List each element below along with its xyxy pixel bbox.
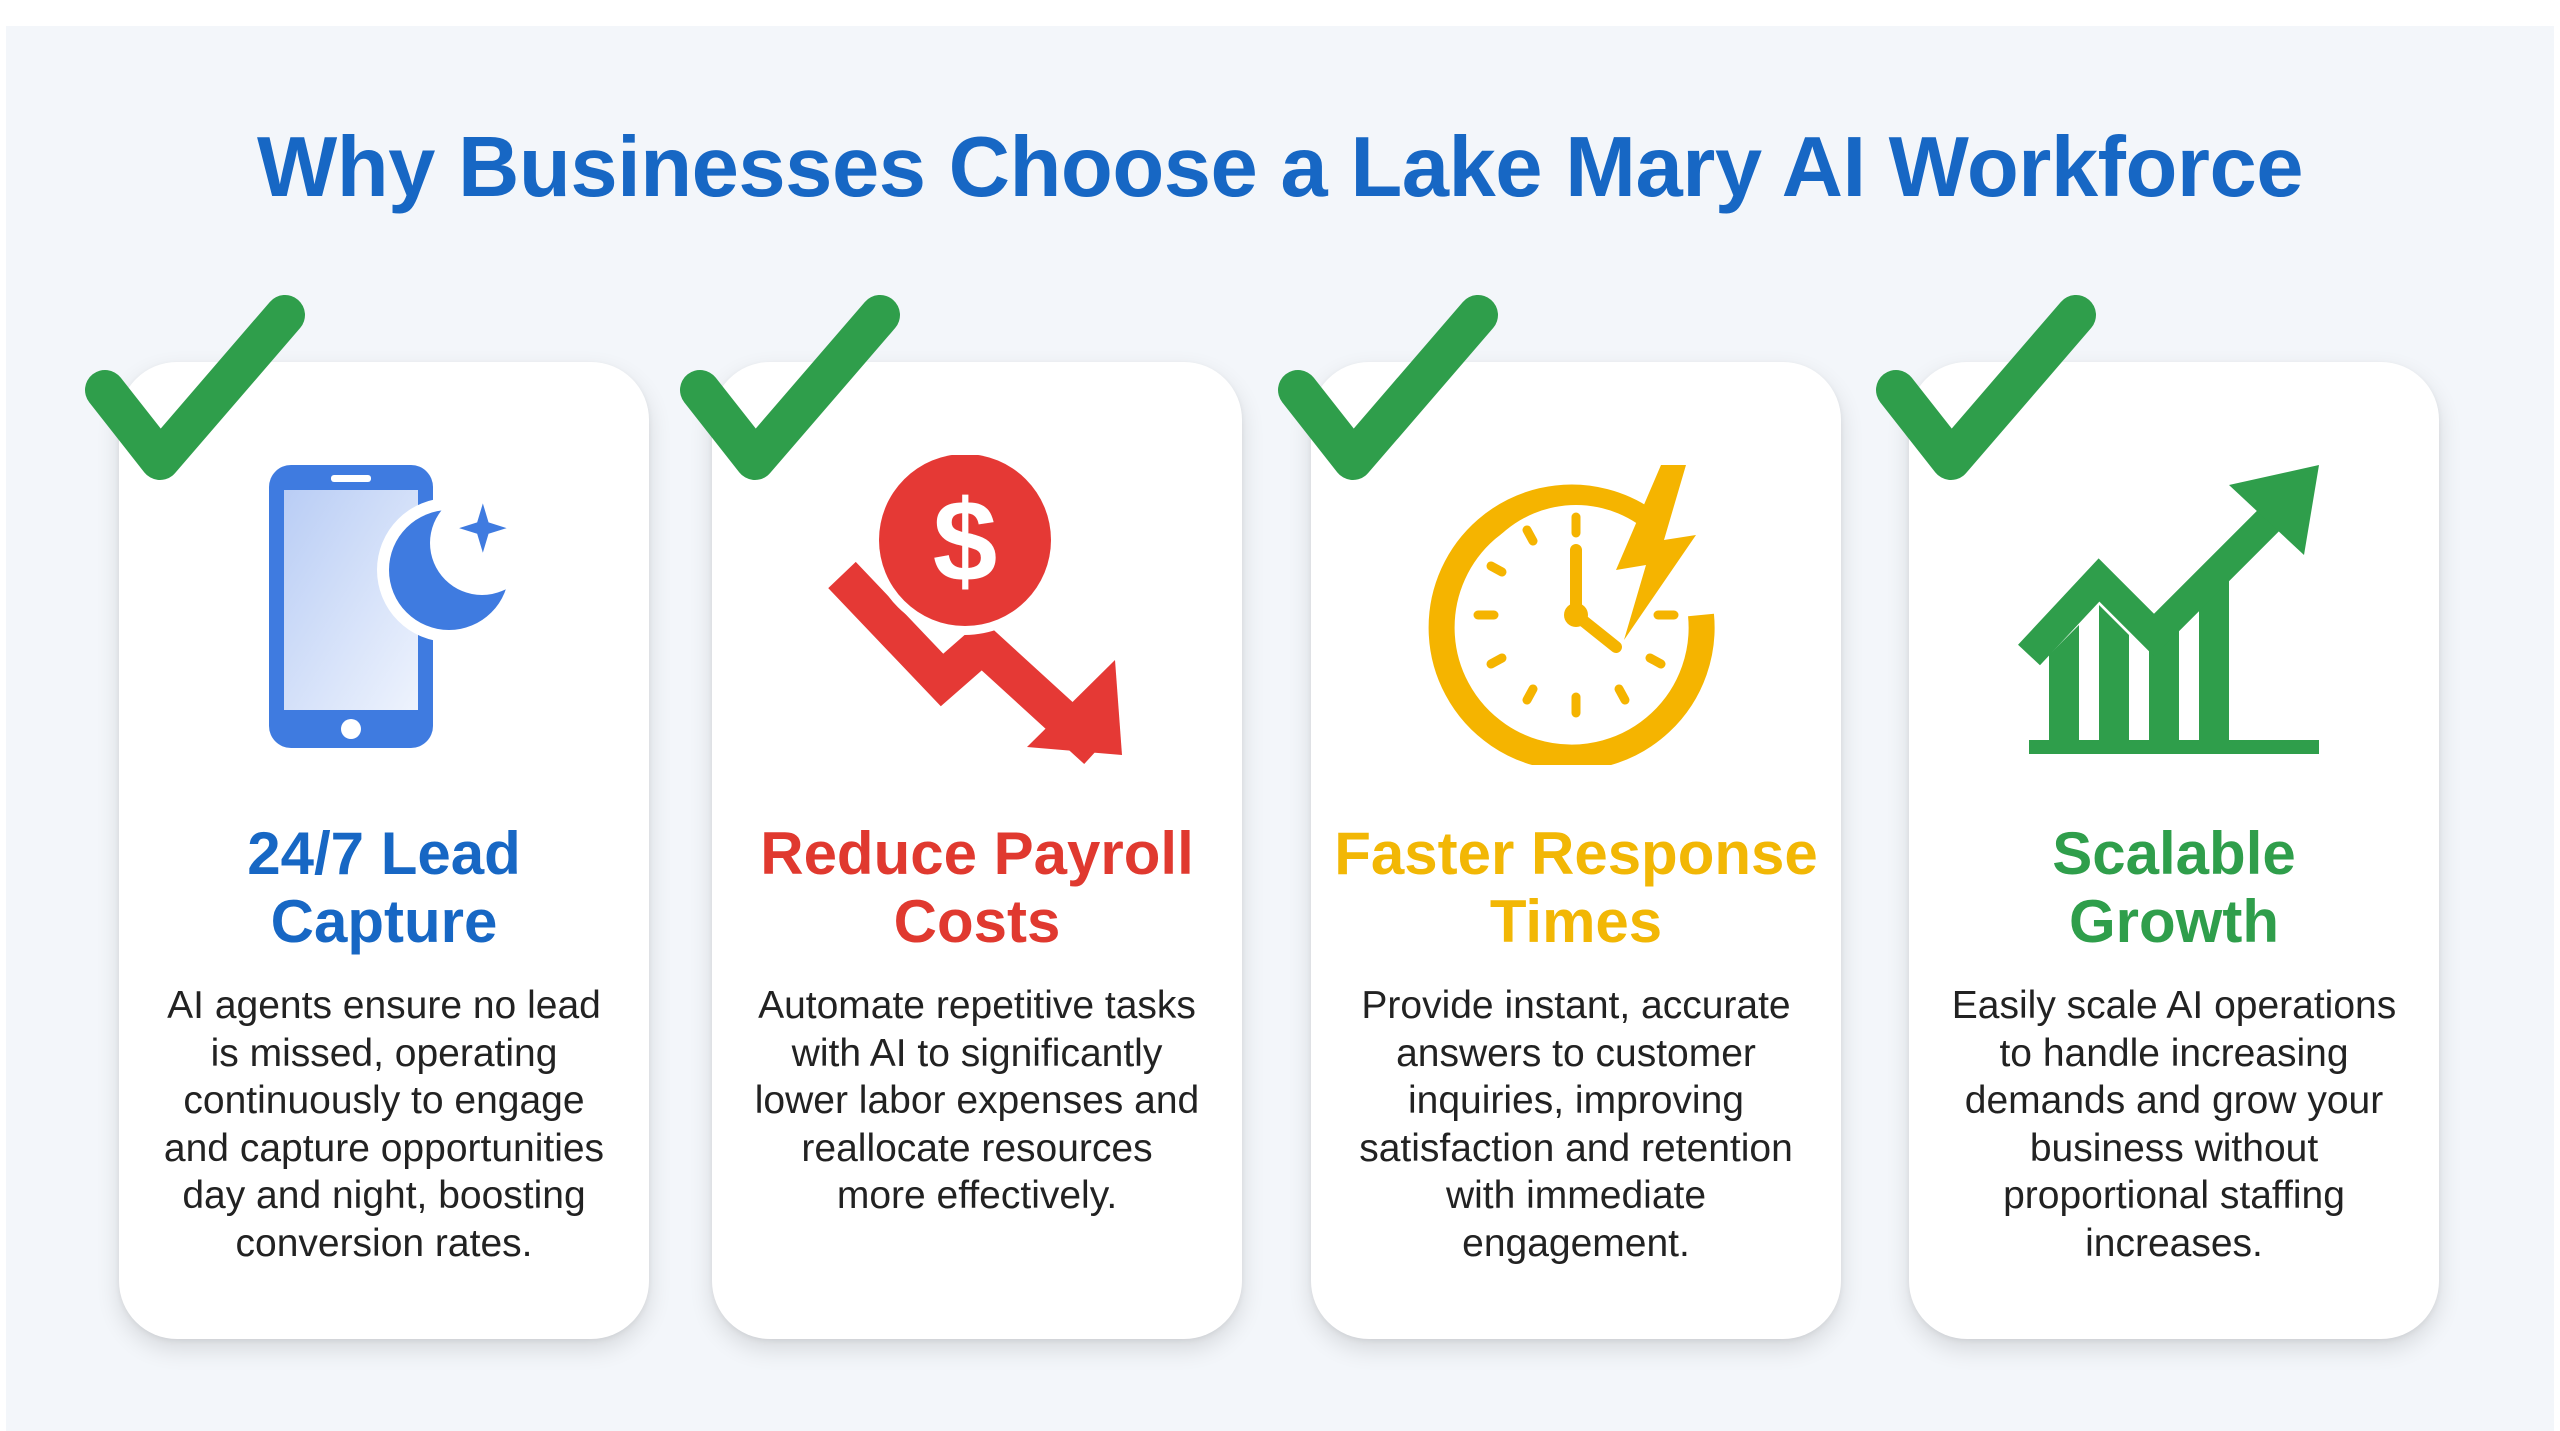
body 3: Provide instant, accurate answers to customer inquiries, improving satisfaction and retention with immediate engagement. (1359, 984, 1793, 1264)
icon: dollar down arrow: $ (933, 476, 997, 606)
card 2 (712, 362, 1242, 1339)
card 1 text (164, 820, 604, 1264)
heading 3 (1334, 820, 1818, 955)
body 1: AI agents ensure no lead is missed, operating continuously to engage and capture opportunities day and night, boosting conversion rates. (164, 984, 604, 1264)
card 3 text (1334, 820, 1818, 1264)
icon: clock with lightning (1428, 465, 1715, 765)
heading 4: Growth (2069, 888, 2279, 955)
body 2: reallocate resources (801, 1126, 1153, 1170)
icon: phone with moon (269, 465, 506, 748)
heading 1: Capture (271, 888, 497, 955)
checkmark 1 (85, 295, 305, 480)
heading 3: Faster Response (1334, 820, 1818, 887)
icon: dollar down arrow (828, 455, 1122, 764)
card 3 (1311, 362, 1841, 1339)
heading 2: Reduce Payroll (760, 820, 1194, 887)
checkmark 3 (1278, 295, 1498, 480)
title: Why Businesses Choose a Lake Mary AI Workforce (257, 120, 2303, 215)
body 2 (755, 984, 1199, 1217)
card 4 text (1952, 820, 2396, 1264)
body 2: with AI to significantly (792, 1032, 1162, 1074)
body 2: lower labor expenses and (755, 1079, 1199, 1122)
checkmark 2 (680, 295, 900, 480)
body 2: more effectively. (837, 1174, 1117, 1217)
card 4 (1909, 362, 2439, 1339)
card 1 (119, 362, 649, 1339)
heading 4 (2052, 820, 2296, 955)
heading 3: Times (1490, 888, 1662, 955)
body 4: Easily scale AI operations to handle increasing demands and grow your business without proportional staffing increases. (1952, 984, 2396, 1264)
heading 2: Costs (894, 888, 1060, 955)
heading 1: 24/7 Lead (247, 820, 521, 887)
icon: growth chart (2018, 465, 2319, 754)
heading 1 (247, 820, 521, 955)
heading 4: Scalable (2052, 820, 2296, 887)
card 2 text (755, 820, 1199, 1217)
heading 2 (760, 820, 1194, 955)
checkmark 4 (1876, 295, 2096, 480)
body 2: Automate repetitive tasks (758, 984, 1196, 1027)
